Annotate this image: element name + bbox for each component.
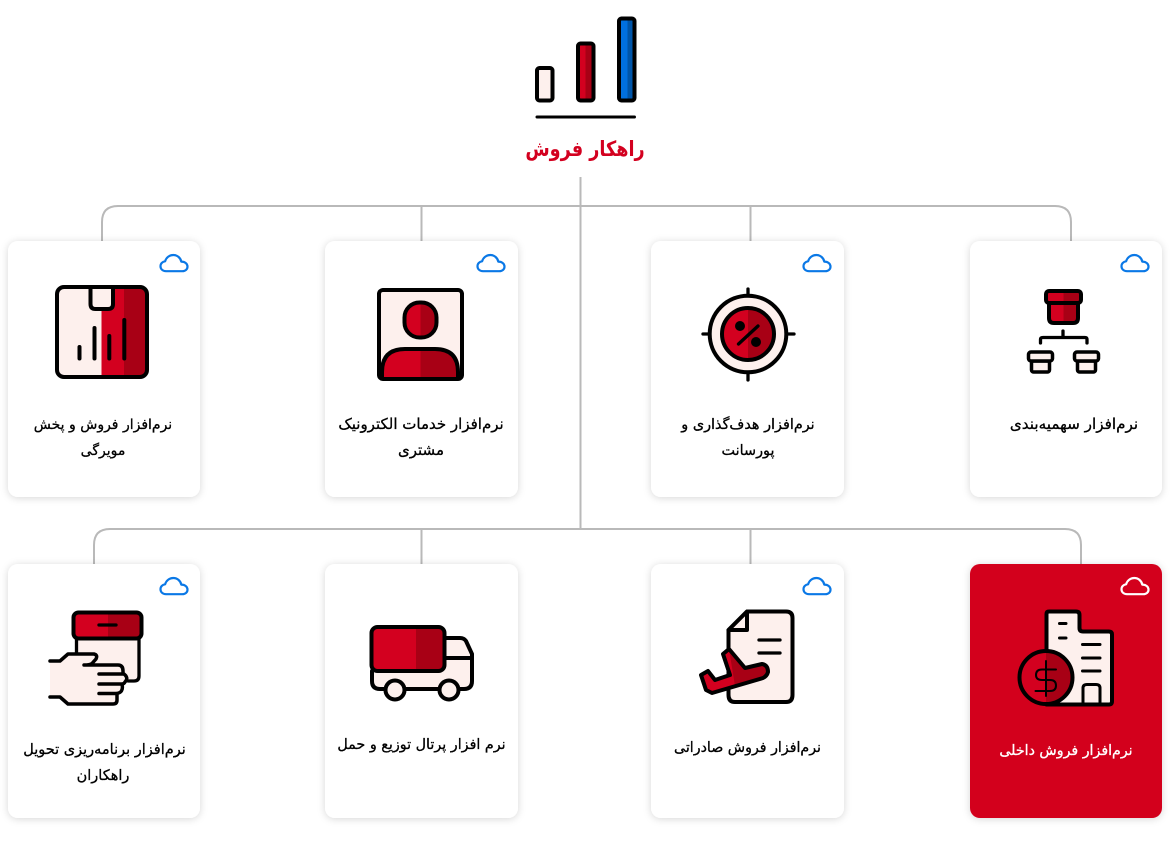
icon: export document with plane <box>701 612 792 702</box>
label: مشتری <box>398 441 444 459</box>
panel: delivery planning software <box>8 564 200 818</box>
panel: export sales software <box>651 564 844 818</box>
panel: targeting and commission software <box>651 241 844 497</box>
panel: domestic sales software (highlighted) <box>970 564 1162 818</box>
label: پورسانت <box>722 443 774 459</box>
icon: box with bars <box>57 287 147 377</box>
icon: cloud <box>160 255 188 271</box>
label <box>338 415 504 459</box>
label: نرم‌افزار فروش داخلی <box>999 743 1133 759</box>
label: راهکاران <box>77 768 129 784</box>
connector lines <box>94 177 1081 564</box>
icon: cloud <box>1122 578 1148 594</box>
label: نرم‌افزار سهمیه‌بندی <box>1010 415 1138 433</box>
icon: percent target <box>703 289 794 380</box>
icon: cloud <box>804 255 830 271</box>
panel: distribution portal software <box>325 564 518 818</box>
label: نرم‌افزار برنامه‌ریزی تحویل <box>23 742 186 758</box>
icon: hand holding package <box>50 612 142 704</box>
title: راهکار فروش <box>525 137 645 161</box>
label <box>34 417 172 459</box>
label <box>680 416 815 459</box>
label: نرم‌افزار فروش صادراتی <box>674 740 821 756</box>
label: نرم‌افزار هدف‌گذاری و <box>680 416 815 433</box>
icon: cloud <box>160 578 188 594</box>
icon: cloud <box>804 578 830 594</box>
label: نرم افزار پرتال توزیع و حمل <box>337 737 506 753</box>
label: نرم‌افزار خدمات الکترونیک <box>338 415 504 433</box>
label <box>23 742 186 784</box>
icon: cloud <box>478 255 504 271</box>
icon: bar chart logo <box>537 18 634 117</box>
icon: customer profile <box>379 290 462 379</box>
icon: cloud <box>1122 255 1148 271</box>
icon: building with coin <box>1020 612 1112 704</box>
icon: delivery truck <box>372 627 472 700</box>
icon: allocation tree <box>1028 291 1098 372</box>
label: مویرگی <box>81 442 125 459</box>
panel: capillary sales software <box>8 241 200 497</box>
label: نرم‌افزار فروش و پخش <box>34 417 172 433</box>
panel: customer e-services software <box>325 241 518 497</box>
panel: allocation software <box>970 241 1162 497</box>
